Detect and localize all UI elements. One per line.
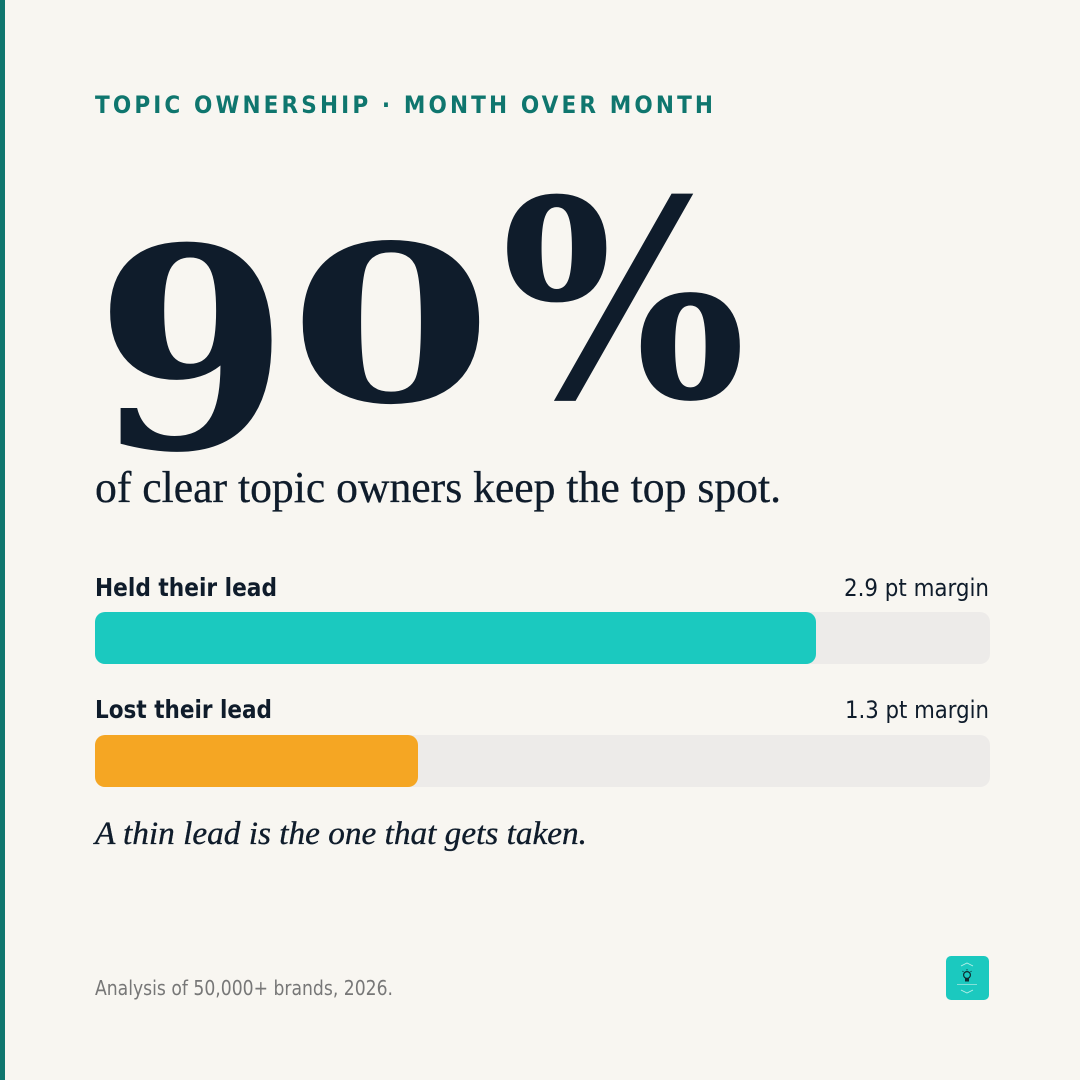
value: 1.3 pt margin: 1.3 pt margin: [845, 696, 989, 724]
bar fill: teal: [95, 612, 816, 664]
kicker heading: TOPIC OWNERSHIP · MONTH OVER MONTH: [95, 91, 713, 119]
big stat: 90%: 0: [289, 197, 493, 452]
label: lost their lead: Lost their lead: [95, 695, 272, 724]
big stat: 90%: [95, 140, 746, 514]
row: lost their lead: [95, 695, 990, 787]
bar fill: amber: [95, 735, 418, 787]
label: held their lead: Held their lead: [95, 573, 277, 602]
accent stripe: [0, 0, 5, 1080]
footer source note: Analysis of 50,000+ brands, 2026.: [95, 976, 393, 1000]
big stat: 90%: 9: [95, 186, 289, 514]
italic takeaway: A thin lead is the one that gets taken.: [93, 816, 587, 852]
subheading: of clear topic owners keep the top spot.: [95, 463, 781, 512]
value: 2.9 pt margin: 2.9 pt margin: [844, 574, 989, 602]
row: held their lead: [95, 573, 990, 664]
bar track: [95, 735, 990, 787]
bar track: [95, 612, 990, 664]
logo badge: [946, 956, 989, 1000]
big stat: 90%: %: [501, 140, 746, 462]
